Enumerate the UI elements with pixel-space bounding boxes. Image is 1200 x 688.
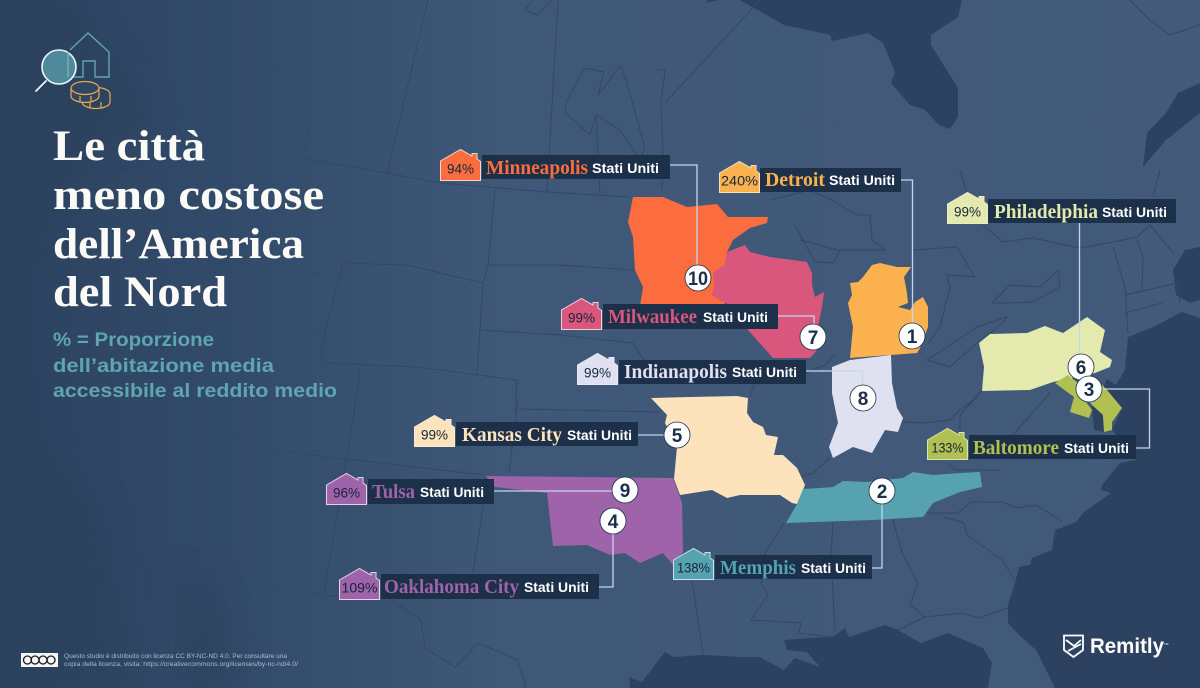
license text: Questo studio è distribuito con licenza CC BY-NC-ND 4.0. Per consultare una bbox=[64, 654, 288, 660]
label: Indianapolis: Indianapolis bbox=[624, 361, 727, 383]
subtitle: percentage legend: accessibile al reddito medio bbox=[53, 381, 337, 402]
label: Tulsa bbox=[326, 474, 494, 504]
connector: Tulsa to 9 bbox=[494, 490, 612, 492]
subtitle: percentage legend: dell’abitazione media bbox=[53, 356, 274, 377]
label: Philadelphia: Stati Uniti bbox=[1102, 205, 1167, 220]
state: Missouri bbox=[651, 396, 805, 504]
connector: Kansas City to 5 bbox=[638, 434, 665, 436]
label: Minneapolis bbox=[440, 150, 670, 180]
label: Tulsa: 96% bbox=[333, 486, 360, 500]
background map: water bodies bbox=[629, 0, 1200, 688]
marker 6 bbox=[1068, 354, 1094, 380]
label: Minneapolis: 94% bbox=[447, 162, 474, 176]
label: Baltimore bbox=[928, 428, 1136, 460]
label: Oklahoma City: Oaklahoma City bbox=[384, 576, 519, 598]
label: Kansas City bbox=[414, 416, 638, 446]
logo: Remitly bbox=[1064, 635, 1169, 658]
icon: Creative Commons badge bbox=[21, 653, 58, 667]
state: Pennsylvania bbox=[979, 317, 1112, 391]
marker 3: 3 bbox=[1084, 380, 1094, 401]
background map: darker western terrain bbox=[0, 0, 240, 688]
marker 2: 2 bbox=[877, 482, 887, 503]
marker 7 bbox=[800, 324, 826, 350]
label: Oklahoma City: Stati Uniti bbox=[524, 580, 589, 595]
label: Memphis: 138% bbox=[677, 560, 710, 576]
marker 6: 6 bbox=[1076, 358, 1086, 379]
label: Baltimore: 133% bbox=[932, 440, 964, 456]
connector: Minneapolis to 10 bbox=[670, 165, 697, 265]
marker 9 bbox=[612, 477, 638, 503]
label: Kansas City: Kansas City bbox=[462, 424, 562, 446]
label: Memphis: Memphis bbox=[720, 557, 796, 579]
label: Indianapolis: Stati Uniti bbox=[732, 365, 797, 380]
label: Oklahoma City bbox=[340, 568, 599, 600]
subtitle: percentage legend bbox=[53, 330, 337, 402]
connector: Detroit to 1 bbox=[901, 180, 912, 324]
label: Milwaukee bbox=[562, 298, 778, 330]
label: Oklahoma City: 109% bbox=[342, 580, 378, 596]
license text bbox=[64, 654, 298, 668]
state: Maryland bbox=[1055, 375, 1122, 432]
connector: Milwaukee to 7 bbox=[778, 316, 814, 325]
icon: lens overlap of house wall bbox=[67, 52, 69, 77]
state: Michigan bbox=[848, 263, 928, 358]
label: Memphis bbox=[674, 548, 872, 580]
state: Indiana bbox=[829, 355, 903, 458]
marker 1: 1 bbox=[907, 327, 918, 348]
icon: coins bbox=[71, 82, 110, 109]
marker 7: 7 bbox=[808, 328, 818, 349]
label: Milwaukee: Stati Uniti bbox=[703, 310, 768, 325]
title: meno costose bbox=[53, 172, 324, 219]
label: Philadelphia: Philadelphia bbox=[994, 201, 1098, 223]
label: Tulsa: Tulsa bbox=[372, 481, 415, 503]
label: Milwaukee: Milwaukee bbox=[608, 306, 697, 328]
marker 9: 9 bbox=[620, 481, 630, 502]
label: Milwaukee: 99% bbox=[568, 310, 595, 326]
label: Baltimore: Baltomore bbox=[973, 437, 1059, 459]
connector: Philadelphia to 6 bbox=[1078, 223, 1080, 355]
label: Philadelphia bbox=[948, 192, 1176, 224]
background map: state and province borders bbox=[286, 0, 1200, 688]
label: Minneapolis: Minneapolis bbox=[486, 157, 588, 179]
logo: trademark: TM bbox=[1164, 642, 1169, 646]
state: Tennessee bbox=[786, 472, 982, 523]
title: Le città bbox=[53, 123, 205, 170]
marker 1 bbox=[899, 323, 925, 349]
title: dell’America bbox=[53, 221, 304, 268]
marker 8 bbox=[850, 385, 876, 411]
label: Minneapolis: Stati Uniti bbox=[592, 161, 659, 176]
state: Wisconsin bbox=[712, 245, 824, 358]
background map: faint western borders bbox=[227, 0, 343, 595]
label: Indianapolis: 99% bbox=[584, 366, 611, 380]
connector: Indianapolis to 8 bbox=[806, 371, 862, 386]
marker 2 bbox=[869, 478, 895, 504]
logo: shield icon bbox=[1064, 636, 1083, 657]
label: Memphis: Stati Uniti bbox=[801, 561, 866, 576]
icon: magnifier handle bbox=[36, 81, 46, 91]
marker 8: 8 bbox=[858, 389, 868, 410]
label: Kansas City: Stati Uniti bbox=[567, 428, 632, 443]
icon: magnifier lens bbox=[42, 50, 76, 84]
label: Kansas City: 99% bbox=[421, 428, 448, 442]
connector: Baltimore to 3 bbox=[1100, 389, 1150, 448]
label: Detroit: Stati Uniti bbox=[829, 173, 895, 188]
label: Detroit: Detroit bbox=[765, 169, 825, 191]
license text: copia della licenza, visita: https://creativecommons.org/licenses/by-nc-nd/4.0/ bbox=[64, 662, 298, 668]
marker 4: 4 bbox=[608, 512, 619, 533]
label: Baltimore: Stati Uniti bbox=[1064, 441, 1129, 456]
label: Indianapolis bbox=[578, 354, 806, 384]
marker 4 bbox=[600, 508, 626, 534]
connector: Memphis to 2 bbox=[872, 503, 882, 568]
state: Minnesota bbox=[628, 197, 768, 306]
marker 10 bbox=[685, 265, 711, 291]
label: Detroit: 240% bbox=[721, 174, 758, 188]
marker 3 bbox=[1076, 376, 1102, 402]
marker 10: 10 bbox=[688, 269, 708, 290]
marker 5 bbox=[664, 422, 690, 448]
label: Philadelphia: 99% bbox=[954, 204, 981, 220]
icon: house outline bbox=[68, 33, 109, 77]
title: del Nord bbox=[53, 269, 227, 316]
title bbox=[53, 123, 324, 316]
state: Oklahoma bbox=[486, 476, 683, 565]
label: Tulsa: Stati Uniti bbox=[420, 485, 484, 500]
marker 5: 5 bbox=[672, 426, 683, 447]
connector: Oklahoma City to 4 bbox=[599, 533, 613, 587]
subtitle: percentage legend: % = Proporzione bbox=[53, 330, 214, 351]
logo: wordmark: Remitly bbox=[1090, 635, 1164, 658]
label: Detroit bbox=[720, 162, 901, 192]
icon: house, magnifier and coins bbox=[36, 33, 110, 109]
